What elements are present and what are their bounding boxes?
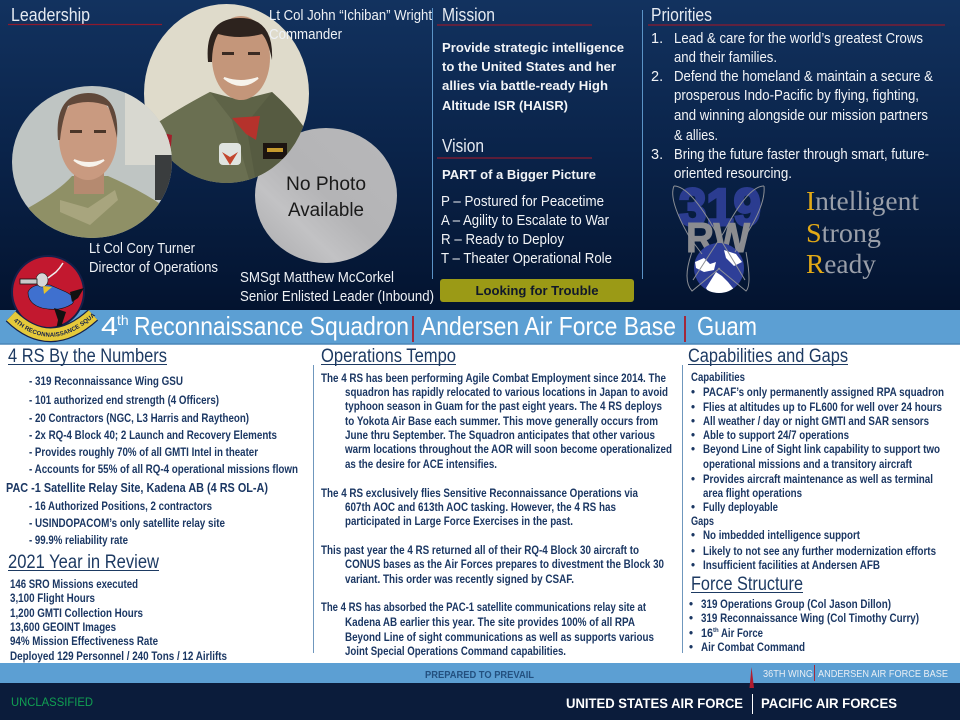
command labels — [566, 694, 897, 714]
capabilities list: • — [691, 444, 695, 456]
panel: mission — [437, 5, 624, 113]
priorities list: Lead & care for the world’s greatest Crows — [674, 31, 923, 47]
vision statement: T – Theater Operational Role — [441, 251, 612, 267]
priorities list: Defend the homeland & maintain a secure & — [674, 69, 933, 85]
acronym: Intelligent Strong Ready: Ready — [806, 249, 877, 279]
priorities list: oriented resourcing. — [674, 166, 792, 182]
column divider lines top — [432, 8, 642, 279]
heading: Mission: Mission — [442, 5, 495, 25]
photo: Lt Col John Wright — [144, 4, 309, 183]
gaps list: • — [691, 560, 695, 572]
slogan: Prepared to Prevail: PREPARED TO PREVAIL — [425, 669, 535, 681]
priorities list: Bring the future faster through smart, future- — [674, 147, 929, 163]
panel: leadership — [8, 0, 434, 305]
vision statement: A – Agility to Escalate to War — [441, 213, 609, 229]
paragraph: agile combat employment: typhoon season in Guam for the past eight years. The 4 RS deploys — [345, 401, 662, 413]
paragraph: sensitive reconnaissance: The 4 RS exclusively flies Sensitive Reconnaissance Operations via — [321, 488, 639, 500]
heading: Capabilities and Gaps: Capabilities and Gaps — [688, 346, 848, 367]
paragraph: block 30 divestment — [321, 545, 664, 586]
wing and base label: 36TH WING — [763, 668, 813, 680]
paragraph: block 30 divestment: variant. This order was recently signed by CSAF. — [345, 574, 574, 586]
gaps list: • — [691, 546, 695, 558]
gaps list: No imbedded intelligence support — [703, 530, 860, 542]
priorities list: 3. — [651, 147, 663, 163]
title band: th — [117, 312, 129, 328]
top dark background panel — [0, 0, 960, 310]
vision statement: P – Postured for Peacetime — [441, 194, 604, 210]
title band: 4 — [101, 311, 118, 341]
no photo placeholder circle: Available — [288, 200, 364, 221]
motto badge: Looking for Trouble — [440, 279, 634, 302]
numbers list: - 101 authorized end strength (4 Officers) — [29, 395, 219, 407]
numbers list: - Provides roughly 70% of all GMTI Intel in theater — [29, 447, 258, 459]
priorities list: & allies. — [674, 128, 718, 144]
acronym: Intelligent Strong Ready — [806, 186, 919, 279]
panel: 4 RS by the numbers — [6, 346, 298, 547]
wing and base label — [763, 665, 948, 681]
priorities list: 2. — [651, 69, 663, 85]
year in review list — [10, 579, 227, 663]
capabilities list: operational missions and a transitory aircraft — [703, 459, 912, 471]
year in review list: 94% Mission Effectiveness Rate — [10, 636, 158, 648]
title band — [0, 310, 960, 344]
title band: Guam — [697, 311, 757, 341]
command labels: PACIFIC AIR FORCES — [761, 695, 897, 711]
panel: vision — [437, 136, 634, 302]
force structure list: Air Combat Command — [701, 642, 805, 654]
paragraph: block 30 divestment: This past year the 4 RS returned all of their RQ-4 Block 30 aircraft to — [321, 545, 639, 557]
logo: 319 RW wing emblem: RW — [686, 214, 750, 261]
numbers list: - 20 Contractors (NGC, L3 Harris and Raytheon) — [29, 413, 249, 425]
capabilities list: Able to support 24/7 operations — [703, 430, 849, 442]
numbers list: - Accounts for 55% of all RQ-4 operational missions flown — [29, 464, 298, 476]
priorities list — [651, 31, 933, 182]
year in review list: 13,600 GEOINT Images — [10, 622, 116, 634]
vision statement: R – Ready to Deploy — [441, 232, 565, 248]
paragraph: PAC-1 relay site — [321, 602, 654, 658]
heading: Vision: Vision — [442, 136, 484, 156]
panel: priorities — [648, 5, 945, 182]
mission statement: Provide strategic intelligence — [442, 40, 624, 55]
gaps list: Insufficient facilities at Andersen AFB — [703, 560, 880, 572]
vision statement: PART of a Bigger Picture — [442, 167, 596, 182]
force structure list: • — [689, 599, 693, 611]
force structure list: 319 Operations Group (Col Jason Dillon) — [701, 599, 891, 611]
logo: 319 RW wing emblem — [673, 179, 764, 298]
paragraph: sensitive reconnaissance: participated in Large Force Exercises in the past. — [345, 516, 573, 528]
caption: senior enlisted leader — [240, 270, 434, 305]
paragraph: agile combat employment: to Yokota Air Base each summer. This move generally occurs from — [345, 416, 658, 428]
paragraph: PAC-1 relay site: Beyond Line of sight communications as well as supports various — [345, 632, 654, 644]
paragraph: agile combat employment: squadron has rapidly relocated to various locations in Japan to avoid — [345, 387, 668, 399]
capabilities list: • — [691, 474, 695, 486]
numbers list — [6, 376, 298, 547]
panel: force structure — [689, 574, 919, 654]
vision statement — [441, 167, 612, 267]
logo: 319 RW wing emblem: 319 — [679, 179, 761, 237]
panel: capabilities and gaps — [688, 346, 944, 572]
caption: director of operations: Lt Col Cory Turner — [89, 241, 195, 257]
capabilities list — [691, 372, 944, 514]
year in review list: 146 SRO Missions executed — [10, 579, 138, 591]
no photo placeholder circle: No Photo — [286, 174, 366, 195]
paragraph: PAC-1 relay site: Kadena AB earlier this year. The site provides 100% of all RPA — [345, 617, 635, 629]
force structure list — [689, 599, 919, 654]
heading: 4 RS By the Numbers: 4 RS By the Numbers — [8, 346, 167, 367]
paragraph: PAC-1 relay site: Joint Special Operations Command capabilities. — [345, 646, 566, 658]
mission statement: allies via battle-ready High — [442, 78, 608, 93]
paragraph: agile combat employment — [321, 373, 672, 471]
panel: operations tempo — [321, 346, 672, 658]
heading: Leadership: Leadership — [11, 5, 90, 25]
no photo placeholder circle — [255, 128, 397, 263]
paragraph: sensitive reconnaissance — [321, 488, 639, 528]
caption: commander: Lt Col John “Ichiban” Wright — [269, 8, 432, 24]
gaps list: Gaps — [691, 516, 714, 528]
command labels: UNITED STATES AIR FORCE — [566, 695, 743, 711]
capabilities list: • — [691, 430, 695, 442]
priorities list: 1. — [651, 31, 663, 47]
force structure list: • — [689, 642, 693, 654]
force structure list: Air Force — [721, 628, 763, 640]
priorities list: and their families. — [674, 50, 777, 66]
caption: director of operations: Director of Operations — [89, 260, 218, 276]
capabilities list: area flight operations — [703, 488, 802, 500]
caption: senior enlisted leader: Senior Enlisted Leader (Inbound) — [240, 289, 434, 305]
mission statement — [442, 40, 624, 113]
numbers list: - 2x RQ-4 Block 40; 2 Launch and Recovery Elements — [29, 430, 277, 442]
gaps list: • — [691, 530, 695, 542]
panel: body white background — [0, 344, 960, 663]
title band: Andersen Air Force Base — [421, 311, 676, 341]
capabilities list: • — [691, 387, 695, 399]
force structure list: th — [713, 628, 719, 634]
numbers list: - 16 Authorized Positions, 2 contractors — [29, 501, 212, 513]
title band: Reconnaissance Squadron — [134, 311, 409, 341]
heading: Priorities: Priorities — [651, 5, 712, 25]
icon: 4th Reconnaissance Squadron patch — [6, 255, 98, 342]
priorities list: prosperous Indo-Pacific by flying, fighting, — [674, 88, 919, 104]
numbers list: - USINDOPACOM’s only satellite relay site — [29, 518, 225, 530]
mission statement: Altitude ISR (HAISR) — [442, 98, 568, 113]
force structure list: • — [689, 613, 693, 625]
icon: 4th Reconnaissance Squadron patch: 4TH RECONNAISSANCE SQUADRON — [14, 314, 96, 337]
acronym: Intelligent Strong Ready: Strong — [806, 218, 881, 248]
mission statement: to the United States and her — [442, 59, 616, 74]
caption: senior enlisted leader: SMSgt Matthew McCorkel — [240, 270, 394, 286]
capabilities list: • — [691, 416, 695, 428]
paragraph: agile combat employment: The 4 RS has been performing Agile Combat Employment since 2014. The — [321, 373, 666, 385]
caption: director of operations — [89, 241, 218, 276]
heading: Operations Tempo: Operations Tempo — [321, 346, 456, 367]
capabilities list: Capabilities — [691, 372, 745, 384]
motto badge: Looking for Trouble: Looking for Trouble — [476, 284, 599, 298]
caption: commander — [269, 8, 432, 43]
force structure list: 319 Reconnaissance Wing (Col Timothy Curry) — [701, 613, 919, 625]
numbers list: PAC -1 Satellite Relay Site, Kadena AB (4 RS OL-A) — [6, 481, 268, 495]
red spike — [750, 667, 754, 688]
force structure list: • — [689, 628, 693, 640]
capabilities list: • — [691, 502, 695, 514]
gaps list — [691, 516, 936, 572]
panel: 2021 year in review — [8, 552, 227, 663]
year in review list: 1,200 GMTI Collection Hours — [10, 608, 143, 620]
classification marking: UNCLASSIFIED — [11, 695, 93, 709]
paragraph: agile combat employment: June thru September. The Squadron anticipates that other various — [345, 430, 655, 442]
year in review list: 3,100 Flight Hours — [10, 593, 95, 605]
paragraph: agile combat employment: as the desire for ACE intensifies. — [345, 459, 497, 471]
acronym: Intelligent Strong Ready: Intelligent — [806, 186, 919, 216]
year in review list: Deployed 129 Personnel / 240 Tons / 12 Airlifts — [10, 651, 227, 663]
photo: Lt Col Cory Turner — [10, 85, 175, 240]
numbers list: - 99.9% reliability rate — [29, 535, 128, 547]
paragraph: agile combat employment: warm locations throughout the AOR will soon become operationalized — [344, 444, 672, 456]
paragraph: block 30 divestment: CONUS bases as the Air Forces prepares to divestment the Block 30 — [345, 559, 664, 571]
paragraph: PAC-1 relay site: The 4 RS has absorbed the PAC-1 satellite communications relay site at — [321, 602, 646, 614]
numbers list: - 319 Reconnaissance Wing GSU — [29, 376, 183, 388]
heading: Force Structure: Force Structure — [691, 574, 803, 595]
priorities list: and winning alongside our mission partners — [674, 108, 928, 124]
caption: commander: Commander — [269, 27, 342, 43]
force structure list: 16 — [701, 628, 713, 640]
paragraph: sensitive reconnaissance: 607th AOC and 613th AOC tasking. However, the 4 RS has — [345, 502, 616, 514]
heading: 2021 Year in Review: 2021 Year in Review — [8, 552, 159, 573]
body column dividers — [314, 365, 682, 653]
capabilities list: • — [691, 402, 695, 414]
capabilities list: Fully deployable — [703, 502, 778, 514]
footer band — [0, 663, 960, 720]
